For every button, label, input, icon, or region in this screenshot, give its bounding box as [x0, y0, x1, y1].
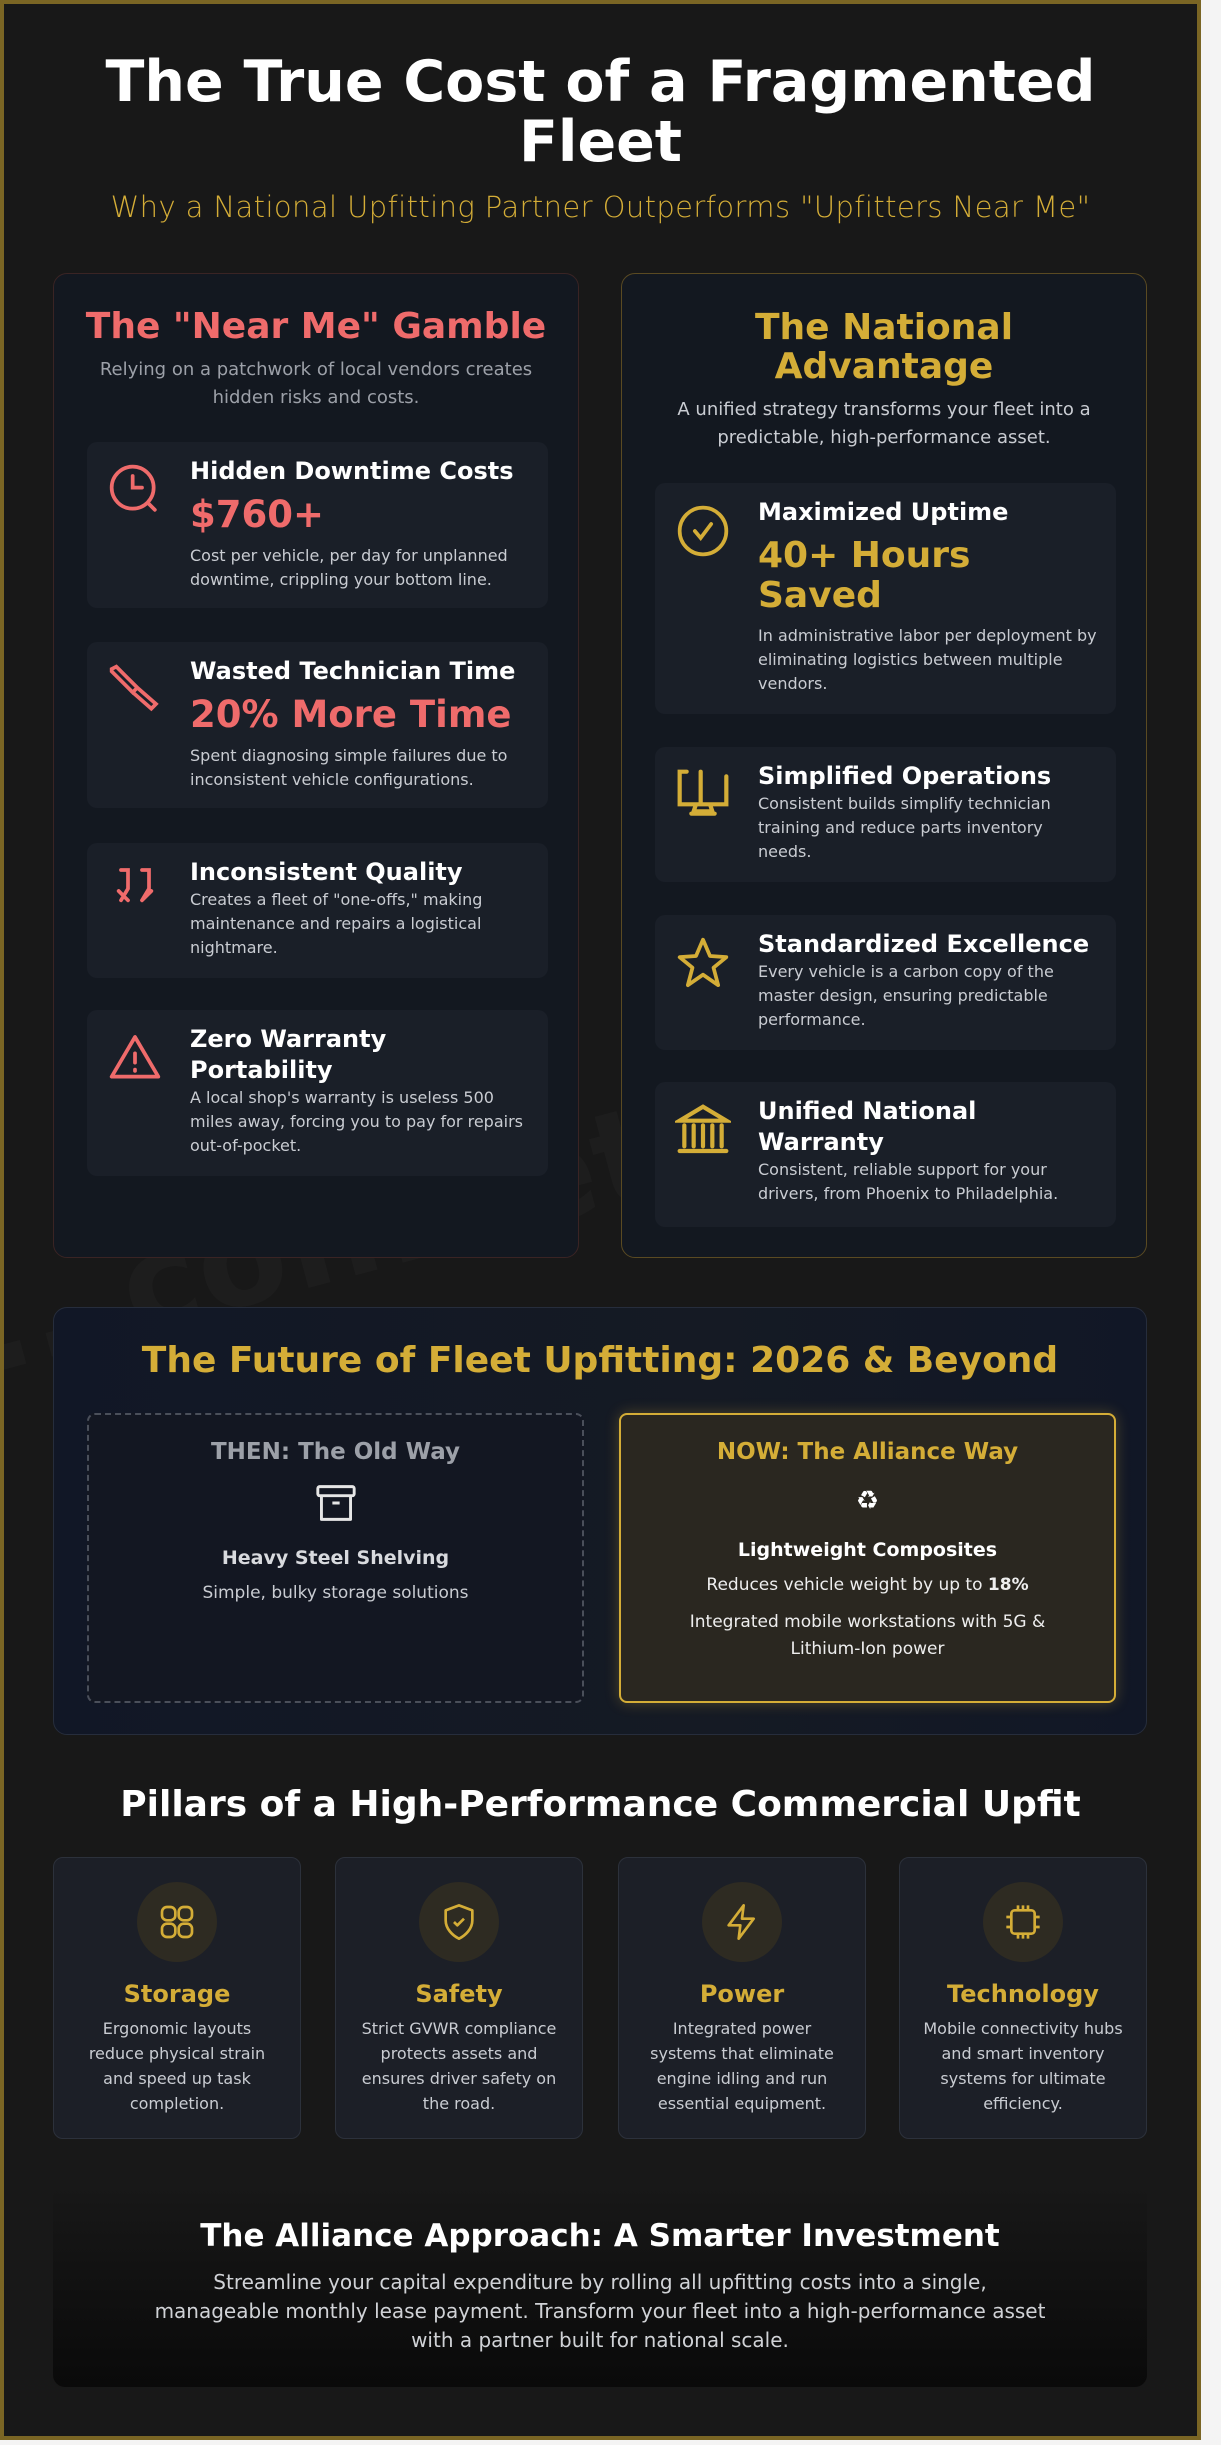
text: Every vehicle is a carbon copy of the master design, ensuring predictable performance. [758, 962, 1054, 1029]
text [190, 457, 514, 589]
heading: national: The National [755, 307, 1013, 348]
text: A local shop's warranty is useless 500 miles away, forcing you to pay for repairs out-of-pocket. [190, 1088, 523, 1155]
icon: chip [983, 1882, 1063, 1962]
text: alliance: manageable monthly lease payment. Transform your fleet into a high-performance asset with a partner built for national scale. [155, 2299, 1045, 2352]
icon: monitor [678, 770, 728, 816]
text [190, 858, 482, 957]
pillar: storage: Ergonomic layouts reduce physical strain and speed up task completion. [89, 2019, 265, 2113]
box: now: Integrated mobile workstations with 5G & Lithium-Ion power [690, 1612, 1045, 1659]
text [758, 1097, 1058, 1203]
title: The True Cost of a Fragmented [106, 49, 1095, 115]
box: now: Reduces vehicle weight by up to 18% [706, 1575, 1029, 1595]
text [758, 498, 1097, 693]
card: warranty national [655, 1082, 1116, 1227]
heading: national [755, 307, 1013, 387]
text: Consistent, reliable support for your drivers, from Phoenix to Philadelphia. [758, 1160, 1058, 1203]
pillar: safety [335, 1857, 583, 2139]
heading: pillars: Pillars of a High-Performance Commercial Upfit [120, 1784, 1081, 1825]
icon: wrench [110, 664, 159, 712]
text: 20% More Time [190, 693, 511, 736]
pillar: technology: Mobile connectivity hubs and smart inventory systems for ultimate efficiency. [923, 2019, 1123, 2113]
text: alliance: Streamline your capital expenditure by rolling all upfitting costs into a single, [213, 2270, 987, 2294]
card: uptime [655, 483, 1116, 714]
heading: near me: The "Near Me" Gamble [86, 306, 546, 347]
text: Saved [758, 575, 882, 616]
intro text: Relying on a patchwork of local vendors creates hidden risks and costs. [100, 359, 532, 408]
card: quality [87, 843, 548, 978]
text: Inconsistent Quality [190, 858, 463, 886]
card: excellence [655, 915, 1116, 1050]
panel: near me gamble [53, 273, 579, 1258]
heading: then: THEN: The Old Way [211, 1439, 460, 1465]
icon: composite: ♻ [856, 1486, 879, 1516]
text: In administrative labor per deployment by eliminating logistics between multiple vendors. [758, 626, 1097, 693]
text: Unified National [758, 1097, 976, 1125]
text: Hidden Downtime Costs [190, 457, 514, 485]
pillar: power [618, 1857, 866, 2139]
icon: star [678, 938, 728, 988]
text: then: Heavy Steel Shelving [222, 1547, 449, 1569]
card: operations [655, 747, 1116, 882]
panel: national advantage [621, 273, 1147, 1258]
box: then [87, 1413, 584, 1703]
text: Maximized Uptime [758, 498, 1008, 526]
text: alliance [155, 2270, 1045, 2352]
card: downtime [87, 442, 548, 608]
heading: future: The Future of Fleet Upfitting: 2026 & Beyond [142, 1340, 1058, 1381]
icon: bank [675, 1104, 731, 1154]
icon: check [678, 506, 728, 556]
text: $760+ [190, 493, 324, 536]
icon: bolt [702, 1882, 782, 1962]
text: Simplified Operations [758, 762, 1051, 790]
title [106, 49, 1095, 175]
text: Wasted Technician Time [190, 657, 515, 685]
callout: alliance approach [53, 2184, 1147, 2387]
intro text: A unified strategy transforms your fleet into a predictable, high-performance asset. [677, 399, 1091, 448]
subtitle: Why a National Upfitting Partner Outperforms "Upfitters Near Me" [111, 190, 1090, 224]
card: technician [87, 642, 548, 808]
text: 40+ Hours [758, 535, 970, 576]
icon: quality [116, 868, 154, 902]
pillar: safety: Strict GVWR compliance protects assets and ensures driver safety on the road. [362, 2019, 556, 2113]
card: warranty [87, 1010, 548, 1176]
pillar: safety: Safety [415, 1980, 503, 2008]
pillar: technology [899, 1857, 1147, 2139]
text: Creates a fleet of "one-offs," making maintenance and repairs a logistical nightmare. [190, 890, 482, 957]
text: Standardized Excellence [758, 930, 1089, 958]
panel: future [53, 1307, 1147, 1735]
heading: now: NOW: The Alliance Way [717, 1439, 1018, 1465]
text [758, 930, 1089, 1029]
text: Consistent builds simplify technician training and reduce parts inventory needs. [758, 794, 1051, 861]
text: Zero Warranty Portability [190, 1025, 386, 1084]
text: Warranty [758, 1128, 884, 1156]
heading: alliance: The Alliance Approach: A Smarter Investment [200, 2218, 1000, 2254]
text: Cost per vehicle, per day for unplanned downtime, crippling your bottom line. [190, 546, 508, 589]
heading: national: Advantage [775, 346, 993, 387]
pillar: technology: Technology [947, 1980, 1099, 2008]
text [190, 1025, 523, 1155]
box: then: Simple, bulky storage solutions [202, 1583, 468, 1603]
pillar: storage [53, 1857, 301, 2139]
icon: clock [110, 464, 157, 512]
icon: shield [419, 1882, 499, 1962]
text [190, 657, 515, 789]
pillar: power: Power [700, 1980, 784, 2008]
title: Fleet [519, 109, 682, 175]
icon: archive box [316, 1485, 356, 1521]
icon: warning [110, 1035, 160, 1078]
box: now [619, 1413, 1116, 1703]
text: Spent diagnosing simple failures due to inconsistent vehicle configurations. [190, 746, 507, 789]
text: now: Lightweight Composites [738, 1539, 997, 1561]
pillar: power: Integrated power systems that eliminate engine idling and run essential equipment. [650, 2019, 834, 2113]
text [758, 762, 1051, 861]
pillar: storage: Storage [124, 1980, 230, 2008]
icon: grid [137, 1882, 217, 1962]
